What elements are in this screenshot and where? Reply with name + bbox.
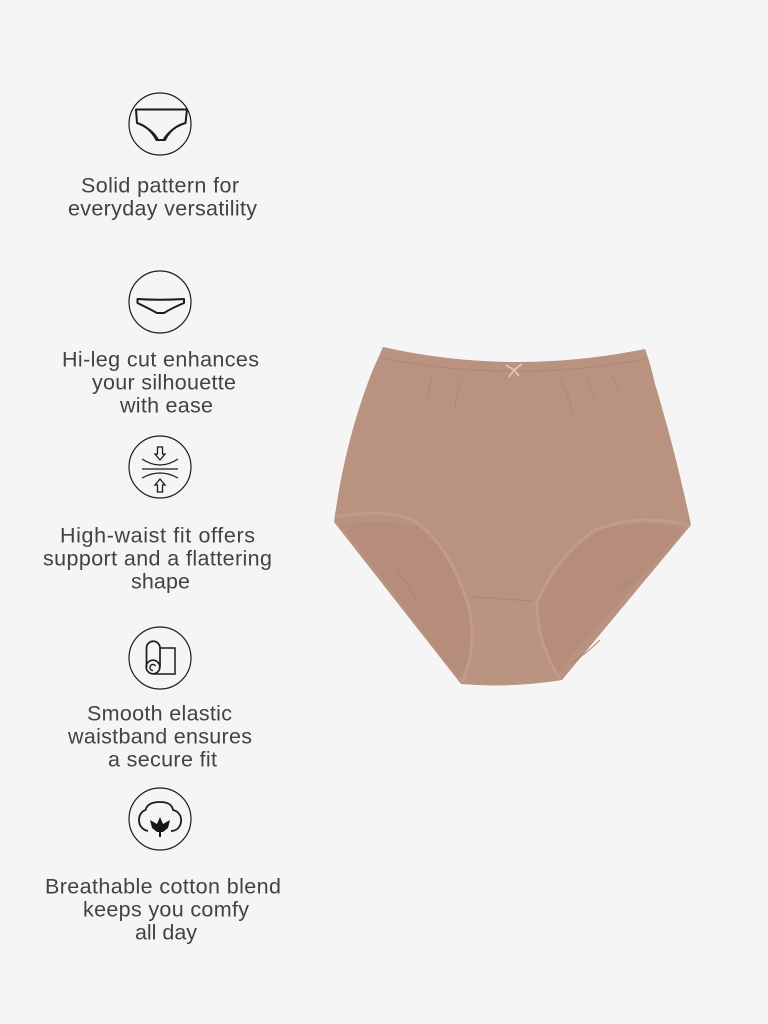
icon: cotton boll <box>129 788 191 850</box>
text: hi-leg cut: your silhouette <box>92 370 236 394</box>
feature: hi-leg cut <box>62 271 259 418</box>
text: elastic waistband: Smooth elastic <box>87 702 232 726</box>
text: hi-leg cut: Hi-leg cut enhances <box>62 348 259 372</box>
text: hi-leg cut: with ease <box>119 394 213 418</box>
text: elastic waistband: a secure fit <box>108 748 217 772</box>
text: solid pattern: Solid pattern for <box>81 174 239 198</box>
text: hi-leg cut <box>62 348 259 418</box>
text: high-waist fit: support and a flattering <box>43 546 272 570</box>
text: cotton blend <box>45 874 281 944</box>
gusset <box>461 598 560 685</box>
text: elastic waistband: waistband ensures <box>67 724 252 748</box>
feature: high-waist fit <box>43 436 272 594</box>
icon: hi-leg cut <box>129 271 191 333</box>
icon: fabric roll <box>129 627 191 689</box>
text: solid pattern <box>68 174 257 220</box>
text: solid pattern: everyday versatility <box>68 196 257 220</box>
text: cotton blend: Breathable cotton blend <box>45 874 281 898</box>
text: cotton blend: all day <box>135 920 197 944</box>
text: elastic waistband <box>67 702 252 772</box>
icon: full brief <box>129 93 191 155</box>
product: high-waist brief <box>334 347 691 685</box>
inner back panel right <box>537 524 684 672</box>
feature: elastic waistband <box>67 627 252 772</box>
seams and folds <box>335 358 690 683</box>
bow <box>506 364 522 377</box>
text: high-waist fit: shape <box>131 570 190 594</box>
text: high-waist fit: High-waist fit offers <box>60 524 255 548</box>
text: high-waist fit <box>43 524 272 594</box>
text: cotton blend: keeps you comfy <box>83 898 249 922</box>
feature: cotton blend <box>45 788 281 944</box>
icon: compression arrows <box>129 436 191 498</box>
garment body <box>334 347 691 685</box>
inner back panel left <box>340 522 473 678</box>
feature: solid pattern <box>68 93 257 220</box>
